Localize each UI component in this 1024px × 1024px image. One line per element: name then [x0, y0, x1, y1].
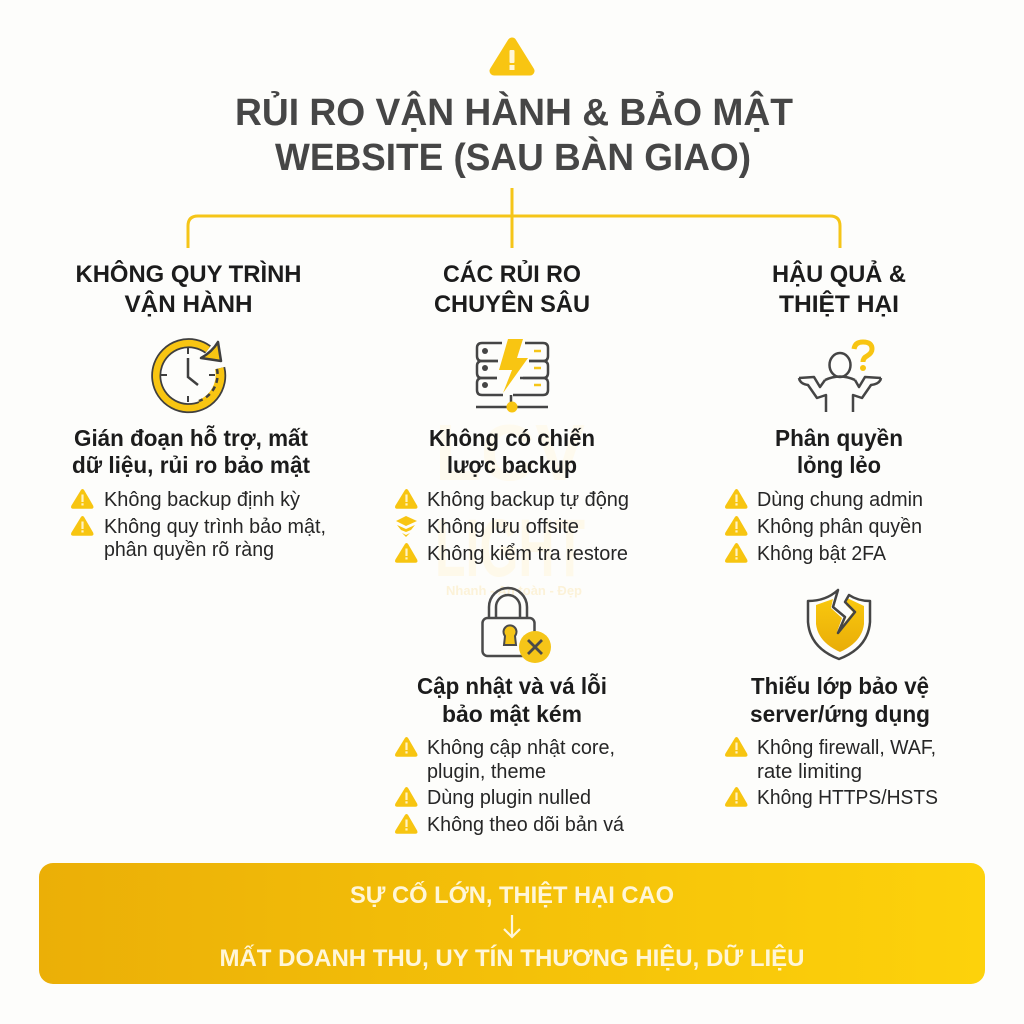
arrow: [504, 915, 520, 937]
column 2 subheading: patches: Cập nhật và vá lỗi: [417, 672, 607, 699]
bottom conclusion banner: [39, 863, 985, 984]
column 3 subheading: protection: server/ứng dụng: [750, 701, 930, 727]
icon: cracked shield: [808, 590, 870, 659]
column 3 list: protection: [726, 737, 938, 809]
icon: server with lightning: [476, 339, 548, 412]
title: WEBSITE (SAU BÀN GIAO): [275, 135, 751, 179]
column 2 list: backup: Không kiểm tra restore: [427, 543, 628, 565]
column 1 heading: [76, 260, 302, 318]
column 2 heading: CHUYÊN SÂU: [434, 290, 590, 318]
column 2 list: backup: Không backup tự động: [427, 489, 629, 511]
column 3 list: permissions: Không bật 2FA: [757, 543, 887, 565]
column 3 list: permissions: [726, 489, 923, 565]
column 2 heading: [434, 259, 590, 318]
watermark: LIGHT: [435, 503, 585, 594]
column 3 list: protection: rate limiting: [757, 761, 862, 783]
column 3 heading: HẬU QUẢ &: [772, 259, 906, 288]
column 2 list: backup: [396, 489, 629, 565]
column 2 subheading: backup: lược backup: [447, 452, 577, 478]
column 2 subheading: backup: [429, 425, 595, 478]
column 3 list: protection: Không firewall, WAF,: [757, 737, 936, 759]
bottom conclusion banner: SỰ CỐ LỚN, THIỆT HẠI CAO: [350, 881, 674, 909]
column 3 list: protection: Không HTTPS/HSTS: [757, 787, 938, 809]
column 1 list: [72, 489, 326, 561]
column 1 subheading: dữ liệu, rủi ro bảo mật: [72, 452, 310, 478]
column 2 list: patches: Không theo dõi bản vá: [427, 814, 625, 836]
column 2 subheading: patches: bảo mật kém: [442, 701, 582, 727]
column 1 subheading: [72, 424, 310, 478]
bottom conclusion banner: MẤT DOANH THU, UY TÍN THƯƠNG HIỆU, DỮ LIỆU: [220, 944, 804, 972]
column 3 subheading: permissions: lỏng lẻo: [797, 452, 881, 478]
watermark: Nhanh - An toàn - Đẹp: [446, 583, 582, 598]
connector lines: [188, 188, 840, 248]
column 1 subheading: Gián đoạn hỗ trợ, mất: [74, 424, 308, 451]
column 3 subheading: permissions: [775, 425, 903, 478]
icon: shrugging person with question mark: [799, 342, 881, 412]
column 3 subheading: protection: [750, 673, 930, 727]
watermark: [435, 408, 585, 598]
column 2 list: backup: Không lưu offsite: [427, 516, 579, 538]
column 3 list: permissions: Dùng chung admin: [757, 489, 923, 511]
title: RỦI RO VẬN HÀNH & BẢO MẬT: [235, 90, 793, 134]
icon: top warning triangle: [494, 42, 530, 71]
column 1 list: phân quyền rõ ràng: [104, 539, 274, 561]
column 3 subheading: permissions: Phân quyền: [775, 425, 903, 451]
column 2 list: patches: plugin, theme: [427, 761, 546, 783]
column 3 heading: [772, 259, 906, 318]
icon: clock with circular arrow: [156, 342, 221, 408]
icon: layered offsite: [396, 516, 417, 537]
column 2 heading: CÁC RỦI RO: [443, 259, 581, 288]
watermark: LCV: [435, 408, 585, 497]
column 1 list: Không backup định kỳ: [104, 489, 300, 511]
column 1 heading: KHÔNG QUY TRÌNH: [76, 260, 302, 288]
column 3 heading: THIỆT HẠI: [779, 290, 899, 318]
column 2 list: patches: Không cập nhật core,: [427, 737, 615, 759]
column 1 heading: VẬN HÀNH: [124, 290, 252, 318]
icon: padlock with x badge: [482, 588, 551, 663]
column 3 subheading: protection: Thiếu lớp bảo vệ: [751, 673, 929, 699]
column 2 list: patches: [396, 737, 625, 836]
column 1 list: Không quy trình bảo mật,: [104, 516, 326, 538]
column 2 subheading: patches: [417, 672, 607, 727]
column 3 list: permissions: Không phân quyền: [757, 516, 922, 538]
column 2 list: patches: Dùng plugin nulled: [427, 787, 591, 809]
title: [235, 90, 793, 179]
column 2 subheading: backup: Không có chiến: [429, 425, 595, 451]
